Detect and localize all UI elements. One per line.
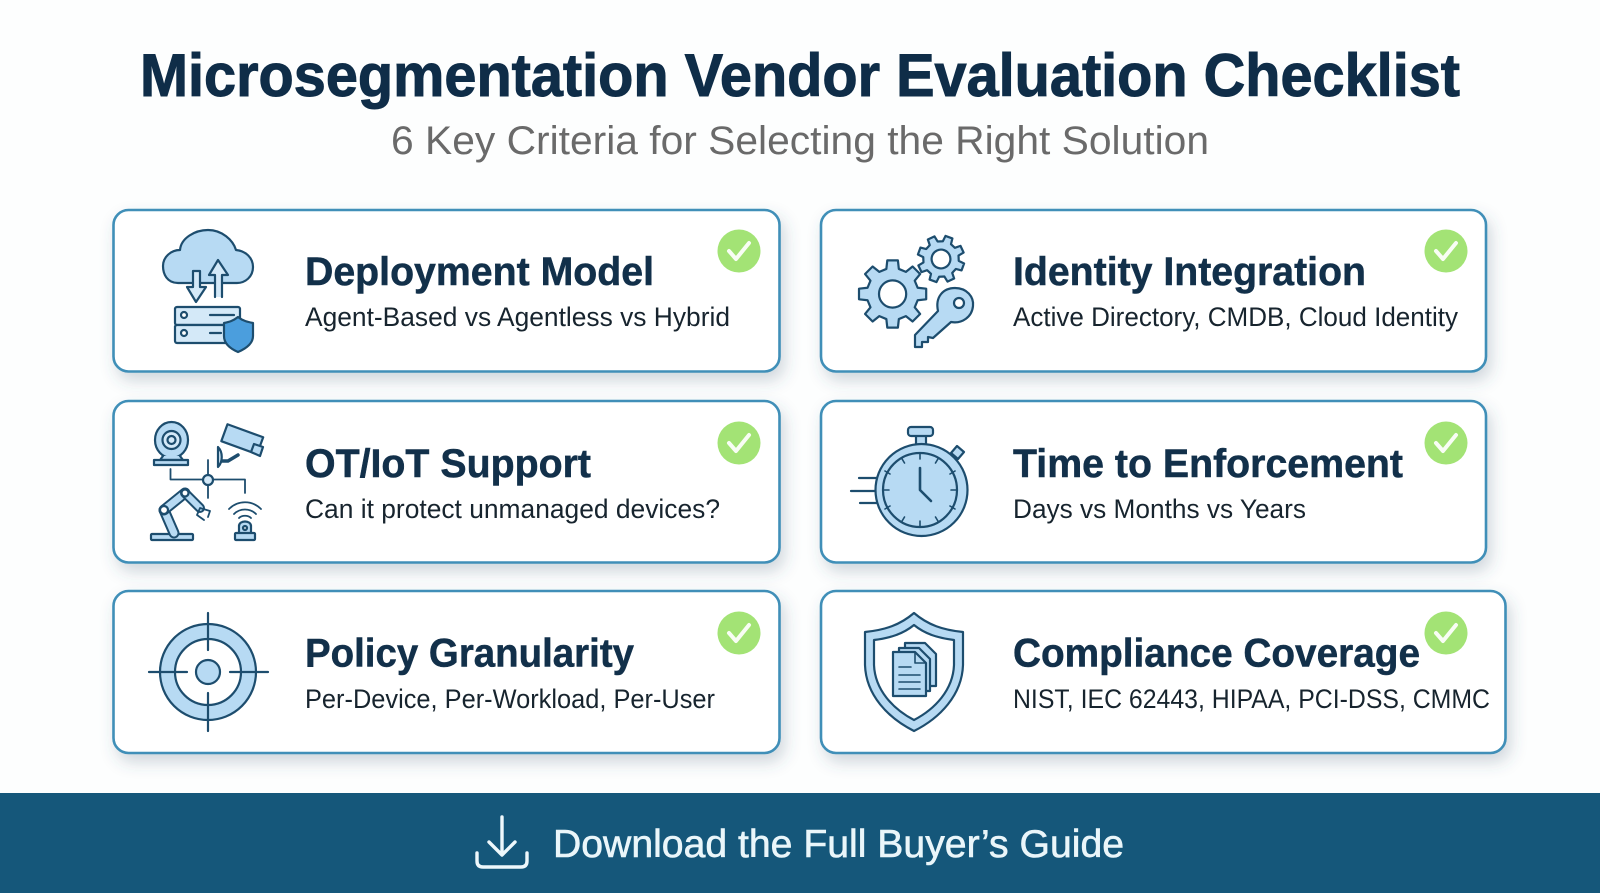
icon: cloud and server <box>163 230 253 352</box>
banner: call to action <box>0 793 1600 893</box>
icon: check badge <box>718 230 760 272</box>
panel: identity integration <box>821 210 1486 372</box>
heading: Deployment Model <box>305 250 654 294</box>
title: Microsegmentation Vendor Evaluation Checklist <box>140 42 1460 109</box>
panel: policy granularity <box>114 591 780 753</box>
icon: check badge <box>1424 230 1468 272</box>
description: Can it protect unmanaged devices? <box>305 494 720 524</box>
heading: Identity Integration <box>1013 250 1366 294</box>
icon: check badge <box>1424 422 1468 464</box>
icon: check badge <box>718 422 760 464</box>
heading: OT/IoT Support <box>305 442 591 486</box>
heading: Compliance Coverage <box>1013 632 1420 676</box>
panel: compliance coverage <box>821 591 1506 753</box>
icon: gears and key <box>859 229 973 347</box>
description: Days vs Months vs Years <box>1013 494 1306 524</box>
description: NIST, IEC 62443, HIPAA, PCI-DSS, CMMC <box>1013 684 1490 714</box>
icon: stopwatch <box>851 427 968 536</box>
description: Per-Device, Per-Workload, Per-User <box>305 684 715 714</box>
subtitle: 6 Key Criteria for Selecting the Right Solution <box>391 119 1209 163</box>
heading: Policy Granularity <box>305 632 635 676</box>
heading: Time to Enforcement <box>1013 442 1403 486</box>
description: Agent-Based vs Agentless vs Hybrid <box>305 302 730 332</box>
call to action text: Download the Full Buyer’s Guide <box>553 823 1124 866</box>
icon: target <box>149 613 268 731</box>
panel: time to enforcement <box>821 401 1486 562</box>
description: Active Directory, CMDB, Cloud Identity <box>1013 302 1458 332</box>
icon: shield with documents <box>865 613 963 731</box>
icon: download <box>477 817 527 867</box>
panel: deployment model <box>114 210 780 372</box>
icon: check badge <box>1424 612 1468 654</box>
icon: check badge <box>718 612 760 654</box>
icon: connected devices <box>151 422 263 540</box>
panel: OT/IoT support <box>114 401 780 562</box>
